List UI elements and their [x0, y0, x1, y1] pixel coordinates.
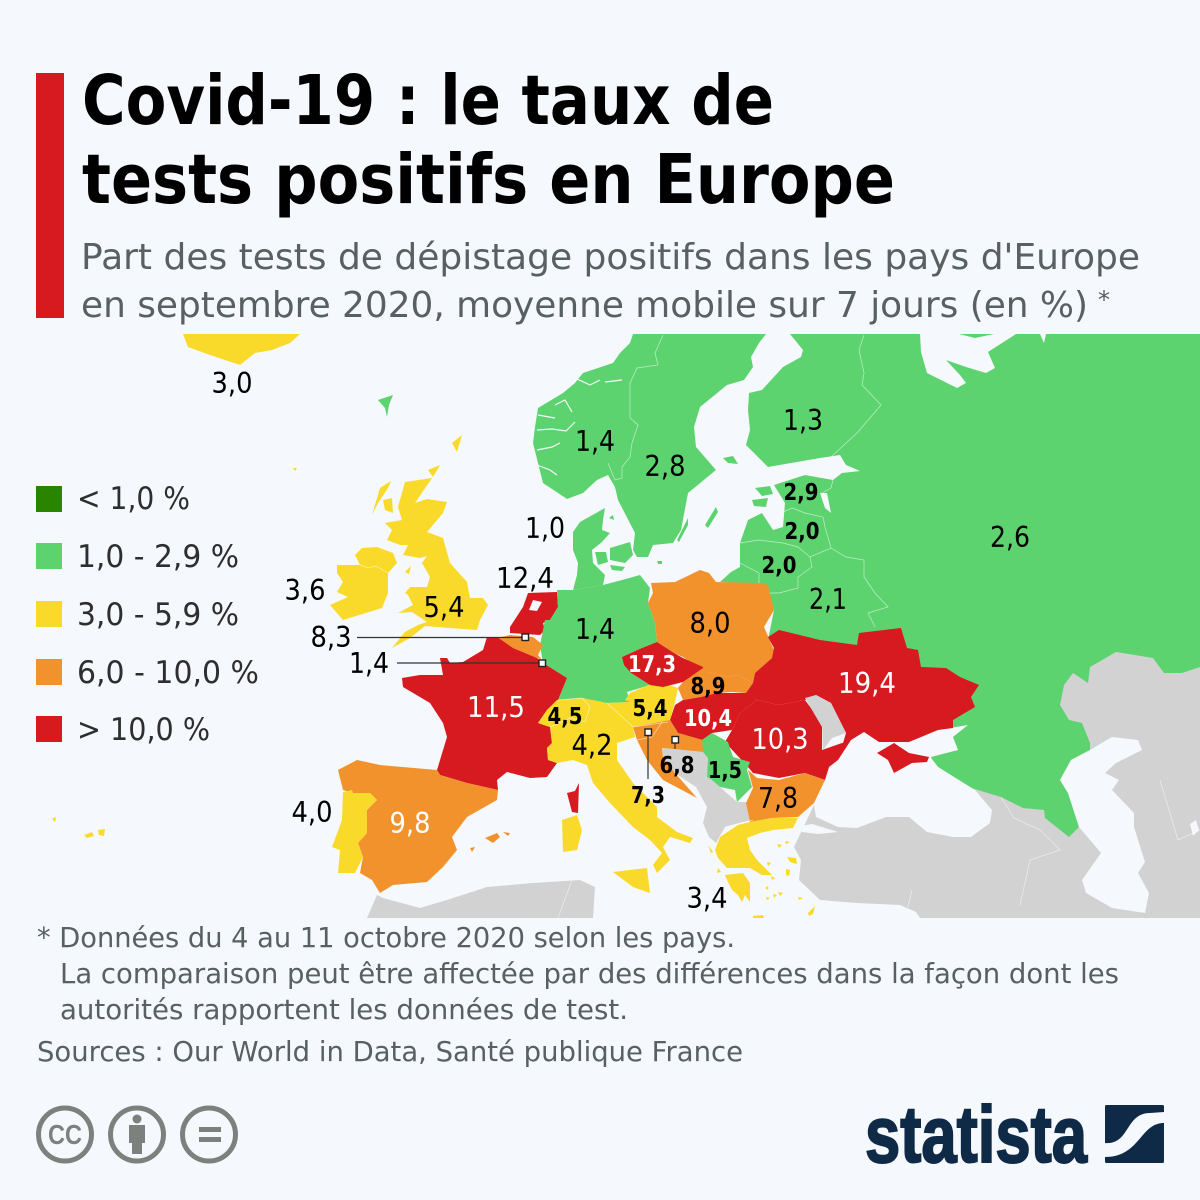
Ireland: [330, 547, 397, 620]
title: [82, 61, 895, 220]
country value labels: 2,0: [784, 519, 820, 545]
country value labels: 1,4: [349, 647, 389, 680]
footnote: autorités rapportent les données de test.: [60, 994, 628, 1026]
country value labels: 8,0: [690, 607, 730, 640]
statista logo mark: [1105, 1105, 1164, 1163]
Greece: [708, 818, 815, 918]
Sicily: [613, 868, 650, 893]
country value labels: 12,4: [496, 562, 554, 595]
icon: no derivatives: [182, 1108, 236, 1161]
legend: < 1,0 %: [77, 481, 190, 517]
Finland, Baltics, Belarus and Russia: [720, 334, 1200, 837]
leader lines and markers: [357, 634, 678, 779]
Denmark: [573, 508, 662, 590]
country value labels: 5,4: [632, 696, 668, 722]
footnote: [37, 922, 1119, 1026]
legend: [36, 481, 259, 748]
Belgium: [497, 635, 543, 660]
Romania: [725, 700, 848, 780]
country value labels: 5,4: [424, 591, 464, 624]
United Kingdom: [293, 435, 488, 648]
Poland: [648, 570, 774, 683]
Balearic Islands: [470, 832, 510, 852]
Corsica: [567, 783, 579, 813]
country value labels: 2,8: [644, 450, 686, 483]
country value labels: 10,3: [752, 723, 808, 756]
legend: 3,0 - 5,9 %: [77, 597, 239, 633]
Czech Republic: [622, 642, 703, 687]
Slovakia: [678, 668, 753, 700]
country border lines: [360, 335, 1200, 918]
country value labels: [212, 367, 1030, 915]
Bosnia and West Balkans: [662, 748, 751, 843]
grey non-data land: Turkey, Caucasus, Kazakhstan: [794, 640, 1200, 918]
Hungary: [670, 693, 757, 740]
Portugal: [332, 790, 377, 873]
country value labels: 1,4: [575, 425, 615, 458]
country value labels: 10,4: [684, 706, 732, 732]
country value labels: 2,0: [762, 553, 796, 579]
country value labels: 1,4: [575, 613, 615, 646]
legend: > 10,0 %: [77, 712, 210, 748]
country value labels: 3,4: [686, 882, 728, 915]
subtitle: *: [1098, 286, 1110, 314]
country value labels: 4,5: [548, 704, 582, 730]
country value labels: 7,3: [631, 783, 665, 809]
title: tests positifs en Europe: [82, 140, 895, 220]
country value labels: 8,3: [310, 621, 352, 654]
map of Europe: [52, 334, 1200, 918]
Bulgaria: [746, 770, 825, 822]
country value labels: 11,5: [467, 691, 525, 724]
country value labels: 1,3: [783, 404, 823, 437]
legend: 6,0 - 10,0 %: [77, 655, 259, 691]
Iceland: [183, 334, 300, 365]
Canary Islands: [52, 817, 105, 838]
Slovenia and Croatia: [633, 720, 703, 798]
Norway and Sweden: [533, 334, 766, 557]
Sardinia: [562, 815, 582, 852]
Norwegian fjords: [537, 378, 622, 475]
country value labels: 2,6: [990, 521, 1030, 554]
country value labels: 7,8: [758, 782, 798, 815]
footnote: La comparaison peut être affectée par des différences dans la façon dont les: [60, 958, 1119, 990]
country value labels: 4,0: [292, 796, 332, 829]
France: [402, 637, 567, 790]
icon: attribution: [110, 1108, 164, 1161]
country value labels: 4,2: [572, 729, 612, 762]
Italy, Switzerland and Austria: [538, 683, 693, 873]
Ukraine: [746, 628, 979, 760]
Germany: [540, 575, 657, 703]
country value labels: 17,3: [628, 652, 676, 678]
title accent bar: [36, 73, 64, 318]
Estonian, Swedish and Aland islands: [677, 456, 773, 542]
subtitle: [81, 237, 1140, 326]
Spain: [338, 760, 498, 893]
sources: Sources : Our World in Data, Santé publique France: [37, 1036, 743, 1068]
statista wordmark: statista: [865, 1090, 1087, 1179]
legend: 1,0 - 2,9 %: [77, 539, 239, 575]
country value labels: 19,4: [838, 667, 896, 700]
Netherlands: [510, 592, 558, 635]
subtitle: Part des tests de dépistage positifs dans les pays d'Europe: [81, 237, 1140, 278]
country value labels: 2,9: [784, 480, 818, 506]
Serbia: [702, 733, 752, 802]
country value labels: 2,1: [809, 583, 847, 616]
country value labels: 1,5: [708, 758, 742, 784]
country value labels: 8,9: [690, 674, 726, 700]
country value labels: 3,6: [284, 574, 326, 607]
subtitle: en septembre 2020, moyenne mobile sur 7 jours (en %): [81, 285, 1088, 326]
country value labels: 1,0: [525, 512, 565, 545]
country value labels: 3,0: [212, 367, 252, 400]
sea overlays: White Sea, Black Sea, Azov, Caspian, lakes: [800, 334, 1199, 913]
grey land: North Africa: [367, 880, 595, 918]
footnote: * Données du 4 au 11 octobre 2020 selon les pays.: [37, 922, 735, 954]
Moldova: [805, 695, 846, 750]
title: Covid-19 : le taux de: [82, 61, 774, 141]
Crimea: [877, 743, 929, 773]
icon: creative commons: [38, 1108, 92, 1161]
icon: creative commons: CC: [48, 1119, 82, 1150]
Faroe Islands: [378, 395, 393, 417]
country value labels: 6,8: [660, 753, 694, 779]
country value labels: 9,8: [390, 807, 430, 840]
